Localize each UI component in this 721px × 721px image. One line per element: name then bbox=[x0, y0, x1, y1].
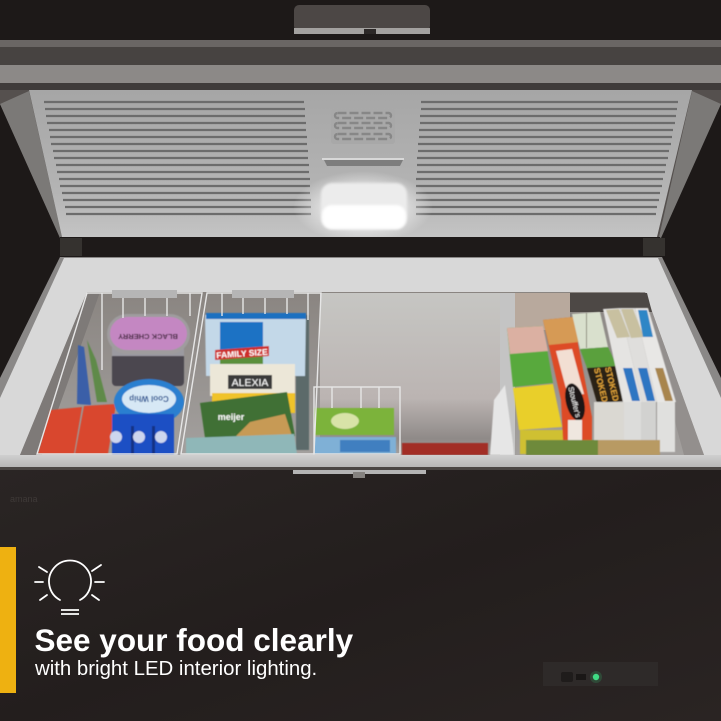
Meijer bag bbox=[200, 392, 295, 438]
middle basket contents: ALEXIA bbox=[232, 377, 268, 389]
freezer rim bbox=[0, 257, 721, 457]
right boxes bbox=[490, 308, 676, 455]
right boxes: STOKED bbox=[603, 366, 621, 402]
lid inner panel bbox=[29, 90, 692, 237]
side pouch bbox=[77, 345, 91, 405]
right boxes: Stouffer's bbox=[566, 386, 583, 419]
heading: See your food clearly bbox=[34, 622, 354, 658]
freezer lid bbox=[0, 40, 721, 238]
left basket contents: Cool Whip bbox=[129, 394, 169, 403]
left basket contents bbox=[38, 314, 190, 455]
brand mark: amana bbox=[10, 494, 38, 504]
small basket contents bbox=[314, 408, 488, 455]
front body bbox=[0, 468, 721, 721]
subheading: with bright LED interior lighting. bbox=[34, 658, 317, 680]
icon: light bulb bbox=[35, 561, 104, 614]
shadow gap and hinges bbox=[60, 237, 665, 258]
side bag bbox=[296, 315, 309, 450]
red packs bbox=[38, 407, 82, 454]
yellow accent bar bbox=[0, 547, 16, 693]
vent right bbox=[416, 102, 678, 214]
LED light bbox=[293, 171, 433, 243]
ice cream tub: BLACK CHERRY bbox=[118, 332, 178, 341]
control panel bbox=[543, 662, 658, 686]
bottom food box bbox=[526, 440, 660, 455]
freezer interior wall bbox=[20, 292, 704, 455]
yellow box bbox=[513, 384, 562, 430]
middle basket contents: FAMILY SIZE bbox=[216, 347, 268, 360]
middle basket contents: meijer bbox=[218, 412, 245, 422]
lid handle bbox=[294, 5, 430, 34]
vent left bbox=[44, 102, 311, 214]
white blue boxes bbox=[603, 308, 642, 402]
white liner bbox=[490, 385, 514, 455]
wire baskets bbox=[37, 290, 400, 454]
Stoked boxes bbox=[572, 312, 608, 349]
front lip of freezer bbox=[0, 455, 721, 478]
green box bbox=[507, 326, 553, 387]
ice cream tub bbox=[107, 314, 190, 386]
Alexia bag bbox=[210, 364, 295, 396]
embossed logo block bbox=[331, 109, 395, 144]
right boxes: STOKED bbox=[592, 367, 610, 403]
middle basket contents bbox=[186, 313, 309, 454]
round tub bbox=[114, 379, 184, 425]
lamp housing bracket bbox=[324, 160, 403, 166]
lower packet bbox=[186, 434, 297, 454]
red Stouffer's bbox=[543, 317, 592, 440]
family size bag bbox=[205, 313, 306, 376]
blue cartons bbox=[112, 414, 174, 455]
